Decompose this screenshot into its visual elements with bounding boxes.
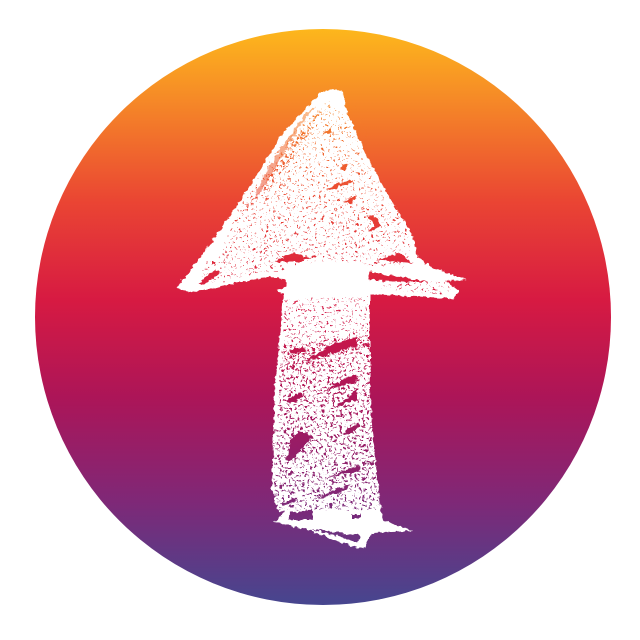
dense chalk texture in stem	[240, 100, 410, 510]
chalk gaps in arrow stem	[282, 337, 360, 543]
sparse chalk texture in head	[200, 100, 450, 380]
chalk gaps in arrow head	[198, 106, 430, 284]
icon: chalk arrow	[177, 88, 468, 548]
arrow body	[177, 88, 468, 548]
